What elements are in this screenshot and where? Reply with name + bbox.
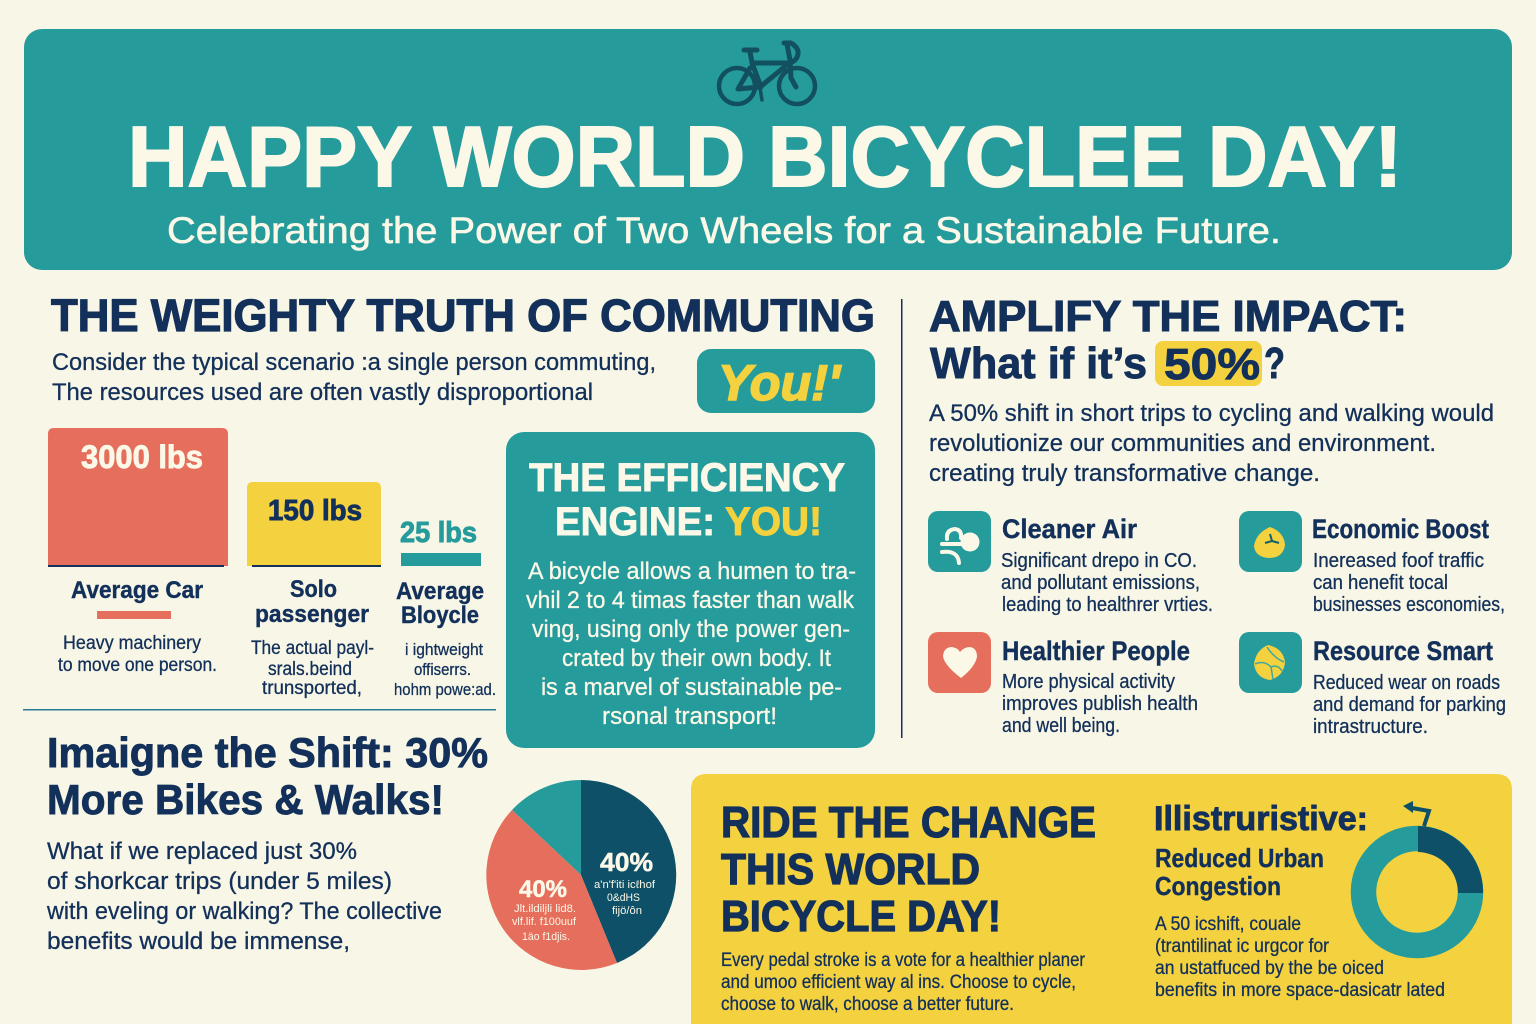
label: solo passenger: The actual payl-: [251, 638, 374, 659]
text block: commuting intro: [52, 349, 656, 406]
bar: car: [48, 428, 228, 567]
heading: amplify the impact: ?: [1264, 339, 1285, 388]
benefit: cleaner air: and pollutant emissions,: [1001, 572, 1200, 594]
label: average bicycle: hohm powe:ad.: [394, 680, 496, 699]
benefit: healthier people: More physical activity: [1002, 671, 1175, 693]
benefit: healthier people: Healthier People: [1002, 636, 1190, 666]
bar: bicycle: [400, 517, 481, 566]
pie label: dark slice: fijö/ôn: [612, 905, 642, 917]
heading: imagine the shift: Imaigne the Shift: 30%: [47, 729, 488, 776]
text block: shift body: benefits would be immense,: [47, 928, 350, 955]
benefit: resource smart: Reduced wear on roads: [1313, 672, 1500, 694]
benefit: economic boost: Economic Boost: [1312, 514, 1489, 544]
heading: amplify the impact: 50%: [1164, 340, 1260, 389]
text block: efficiency body: ving, using only the power gen-: [532, 616, 850, 643]
bar chart: weight comparison: [48, 428, 481, 567]
title: HAPPY WORLD BICYCLEE DAY!: [128, 110, 1402, 205]
pie label: coral slice: 40%: [519, 876, 567, 903]
benefit: healthier people: and well being.: [1002, 715, 1120, 737]
text block: amplify intro: revolutionize our communities and environment.: [929, 430, 1436, 457]
text block: shift body: of shorkcar trips (under 5 miles): [47, 868, 392, 895]
pie label: coral slice: 1äo f1djis.: [522, 931, 570, 943]
text block: congestion body: [1155, 914, 1445, 1001]
subheading: reduced congestion: Congestion: [1155, 871, 1281, 901]
pie label: dark slice: a'n'f'iti icℓhof: [594, 879, 656, 891]
label: average bicycle: i ightweight: [405, 640, 483, 659]
icon: wind: [928, 511, 991, 572]
benefit: resource smart: intrastructure.: [1313, 716, 1428, 738]
pie label: dark slice: 40%: [600, 847, 653, 877]
label: average car: [58, 577, 217, 676]
label: average car: Heavy machinery: [63, 633, 201, 654]
benefit: economic boost: can henefit tocal: [1313, 572, 1448, 594]
text block: ride body: choose to walk, choose a better future.: [721, 994, 1014, 1015]
benefit: healthier people: [928, 632, 1198, 737]
text block: ride body: Every pedal stroke is a vote for a healthier planer: [721, 950, 1086, 971]
icon: globe: [1239, 632, 1302, 693]
text block: efficiency body: is a marvel of sustainable pe-: [541, 674, 842, 701]
heading: imagine the shift: [47, 729, 488, 823]
label: average bicycle: Average: [396, 578, 484, 605]
arrow: [1403, 801, 1429, 826]
benefit: economic boost: [1239, 511, 1505, 616]
text block: efficiency body: crated by their own body. It: [562, 645, 831, 672]
heading: amplify the impact: What if it’s: [930, 339, 1147, 388]
benefit: healthier people: improves publish health: [1002, 693, 1198, 715]
text block: amplify intro: [929, 400, 1494, 487]
label: average car: Average Car: [71, 577, 203, 604]
heading: weighty truth: THE WEIGHTY TRUTH OF COMMUTING: [51, 290, 875, 341]
text block: amplify intro: creating truly transformative change.: [929, 460, 1320, 487]
icon: coin: [1239, 511, 1302, 572]
benefit: economic boost: Inereased foof traffic: [1313, 550, 1484, 572]
pie label: coral slice: [512, 876, 577, 943]
text block: efficiency body: vhil 2 to 4 timas faster than walk: [526, 587, 855, 614]
benefit: cleaner air: [928, 511, 1213, 616]
subtitle: Celebrating the Power of Two Wheels for a Sustainable Future.: [167, 210, 1281, 251]
label: average car: to move one person.: [58, 655, 217, 676]
heading: efficiency engine: [529, 456, 845, 544]
label: solo passenger: srals.beind: [268, 659, 352, 680]
panel: header banner: [24, 29, 1512, 270]
heading: ride the change: BICYCLE DAY!: [721, 892, 1001, 941]
label: average bicycle: Bloycle: [401, 602, 479, 629]
text block: congestion body: A 50 icshift, couale: [1155, 914, 1301, 935]
heading: ride the change: RIDE THE CHANGE: [721, 798, 1096, 847]
subheading: reduced congestion: [1155, 843, 1324, 901]
text block: efficiency body: [526, 558, 856, 730]
callout: You badge: [697, 349, 875, 413]
text block: congestion body: an ustatfuced by the be oiced: [1155, 958, 1384, 979]
benefit: resource smart: and demand for parking: [1313, 694, 1506, 716]
heading: illustrative: Illistruristive:: [1154, 800, 1368, 838]
pie label: dark slice: [594, 847, 656, 917]
panel: ride the change: [691, 774, 1512, 1024]
label: solo passenger: Solo: [290, 576, 337, 603]
text block: congestion body: benefits in more space-dasicatr lated: [1155, 980, 1445, 1001]
text block: commuting intro: Consider the typical scenario :a single person commuting,: [52, 349, 656, 376]
heading: amplify the impact: [929, 292, 1407, 389]
bar: passenger: [247, 482, 381, 567]
benefit: cleaner air: Cleaner Air: [1002, 514, 1137, 544]
panel: efficiency engine: [506, 432, 875, 748]
heading: efficiency engine: YOU!: [725, 500, 822, 544]
pie chart: [486, 780, 676, 970]
benefit: cleaner air: leading to healthrer vrties.: [1002, 594, 1213, 616]
text block: shift body: What if we replaced just 30%: [47, 838, 357, 865]
bar: bicycle: 25 lbs: [400, 517, 477, 549]
text block: congestion body: (trantilinat ic urgcor for: [1155, 936, 1330, 957]
benefit: economic boost: businesses esconomies,: [1313, 594, 1505, 616]
callout: You badge: You!': [718, 355, 842, 411]
text block: ride body: and umoo efficient way al ins. Choose to cycle,: [721, 972, 1076, 993]
bar: car: 3000 lbs: [81, 439, 203, 475]
heading: ride the change: THIS WORLD: [721, 845, 980, 894]
benefit: resource smart: [1239, 632, 1506, 738]
text block: shift body: [46, 838, 442, 955]
benefit: cleaner air: Significant drepo in CO.: [1001, 550, 1197, 572]
pie label: dark slice: 0&dHS: [607, 892, 640, 904]
pie label: coral slice: vlf.lif. f100uuf: [512, 916, 577, 928]
label: solo passenger: [251, 576, 374, 699]
heading: efficiency engine: THE EFFICIENCY: [529, 456, 845, 500]
label: average bicycle: [394, 578, 496, 699]
heading: imagine the shift: More Bikes & Walks!: [47, 776, 444, 823]
icon: bicycle: [719, 43, 815, 104]
heading: ride the change: [721, 798, 1096, 941]
pie label: coral slice: Jlt.ildiljli lid8.: [514, 903, 576, 915]
benefit: resource smart: Resource Smart: [1313, 636, 1493, 666]
heading: amplify the impact: AMPLIFY THE IMPACT:: [929, 292, 1407, 341]
text block: shift body: with eveling or walking? The collective: [46, 898, 442, 925]
label: solo passenger: passenger: [255, 601, 369, 628]
label: solo passenger: trunsported,: [262, 678, 362, 699]
heading: efficiency engine: ENGINE:: [555, 500, 715, 544]
text block: efficiency body: A bicycle allows a humen to tra-: [528, 558, 856, 585]
icon: heart: [928, 632, 991, 693]
text block: ride body: [721, 950, 1086, 1015]
bar: passenger: 150 lbs: [268, 495, 362, 527]
donut chart: [1364, 801, 1483, 946]
text block: efficiency body: rsonal transport!: [602, 703, 777, 730]
text block: amplify intro: A 50% shift in short trips to cycling and walking would: [929, 400, 1494, 427]
subheading: reduced congestion: Reduced Urban: [1155, 843, 1324, 873]
text block: commuting intro: The resources used are often vastly disproportional: [52, 379, 593, 406]
label: average bicycle: offiserrs.: [414, 660, 471, 679]
